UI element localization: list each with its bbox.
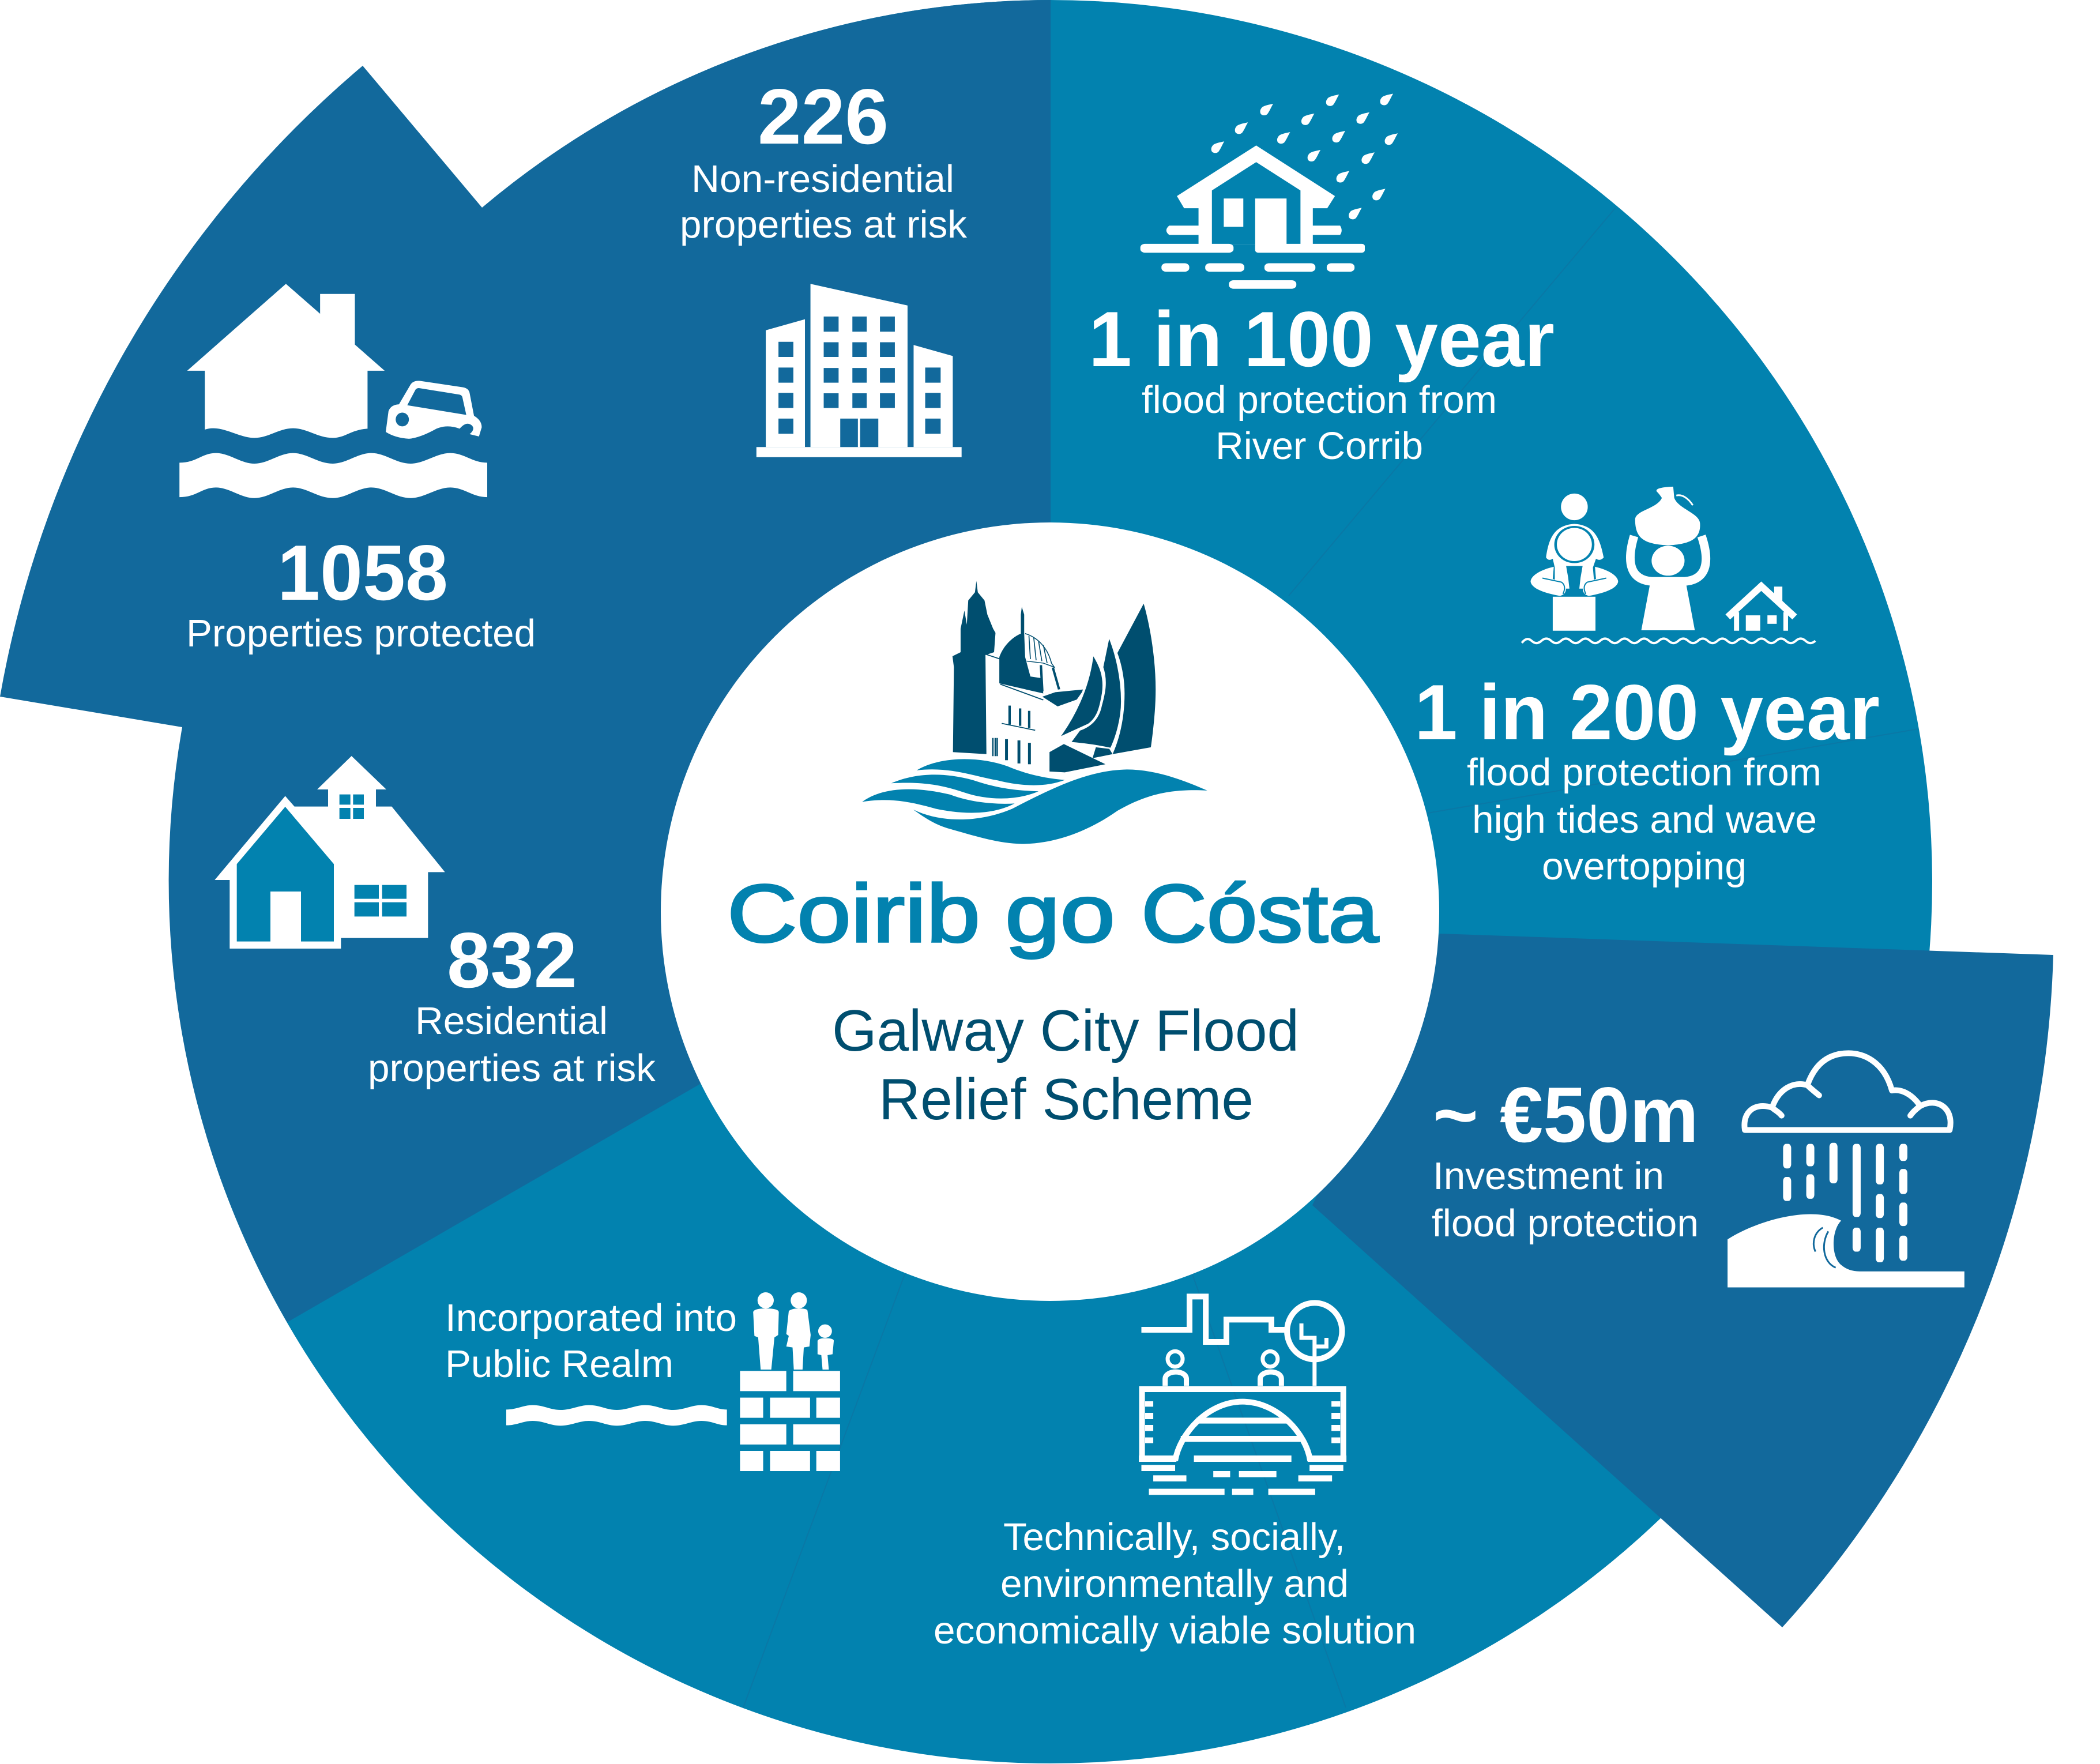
text: 1058 properties protected (186, 529, 536, 655)
icon: flooded house and car (179, 284, 487, 498)
text: 1 in 200 year: high tides and wave (1472, 798, 1817, 841)
text: 1 in 100 year (1089, 295, 1555, 468)
text: 226 non-residential: 226 (758, 73, 889, 160)
text: investment: Investment in (1433, 1154, 1664, 1198)
icon: bridge and town (1139, 1296, 1346, 1495)
text: 226 non-residential: Non-residential (691, 157, 954, 201)
logo waves (862, 759, 1207, 844)
icon: office buildings (757, 284, 962, 457)
text: 832 residential (368, 916, 656, 1090)
text: 226 non-residential (680, 73, 967, 246)
brand name: Cósta (1141, 868, 1379, 960)
text: 1 in 100 year: 1 in 100 year (1089, 295, 1555, 383)
scheme title (832, 999, 1299, 1132)
text: 1058 properties protected: Properties protected (186, 612, 536, 655)
logo sails (1049, 604, 1156, 772)
panel: white centre circle (661, 522, 1439, 1301)
icon: family on flood wall (506, 1292, 840, 1471)
text: 1 in 200 year: overtopping (1542, 845, 1747, 888)
text: viable solution: Technically, socially, (1003, 1515, 1345, 1559)
scheme title: Galway City Flood (832, 999, 1299, 1063)
icon: house in rain (1141, 93, 1398, 289)
text: 1 in 100 year: River Corrib (1215, 424, 1423, 468)
text: 1 in 200 year (1414, 668, 1880, 888)
text: public realm: Public Realm (445, 1342, 673, 1386)
logo: cathedral, sails and waves (862, 581, 1207, 844)
text: viable solution (934, 1515, 1416, 1652)
text: investment (1432, 1071, 1699, 1245)
brand name: go (1005, 868, 1115, 960)
text: 832 residential: properties at risk (368, 1047, 656, 1090)
text: 1 in 200 year: 1 in 200 year (1414, 668, 1880, 756)
text: public realm: Incorporated into (445, 1296, 737, 1340)
text: 1 in 200 year: flood protection from (1467, 751, 1821, 794)
text: viable solution: economically viable solution (934, 1609, 1416, 1652)
text: investment: ~ €50m (1433, 1071, 1699, 1159)
text: 832 residential: 832 (447, 916, 577, 1004)
logo cathedral (953, 581, 1084, 764)
brand name: Coirib (727, 868, 980, 960)
text: investment: flood protection (1432, 1202, 1699, 1245)
panel: dark right wedge (1312, 934, 2053, 1627)
text: 1058 properties protected: 1058 (277, 529, 448, 616)
panel: dark left wedge (0, 0, 1051, 1322)
icon: rain cloud and wave (1728, 1053, 1964, 1287)
text: 832 residential: Residential (415, 999, 608, 1043)
text: 1 in 100 year: flood protection from (1142, 378, 1497, 422)
text: viable solution: environmentally and (1000, 1562, 1349, 1605)
icon: people carrying child and belongings through water (1522, 487, 1815, 643)
scheme title: Relief Scheme (879, 1067, 1254, 1132)
text: public realm (445, 1296, 737, 1386)
seam lines in teal ring (743, 208, 1918, 1707)
text: 226 non-residential: properties at risk (680, 203, 967, 246)
brand name (727, 868, 1379, 960)
icon: residential house (214, 756, 445, 949)
